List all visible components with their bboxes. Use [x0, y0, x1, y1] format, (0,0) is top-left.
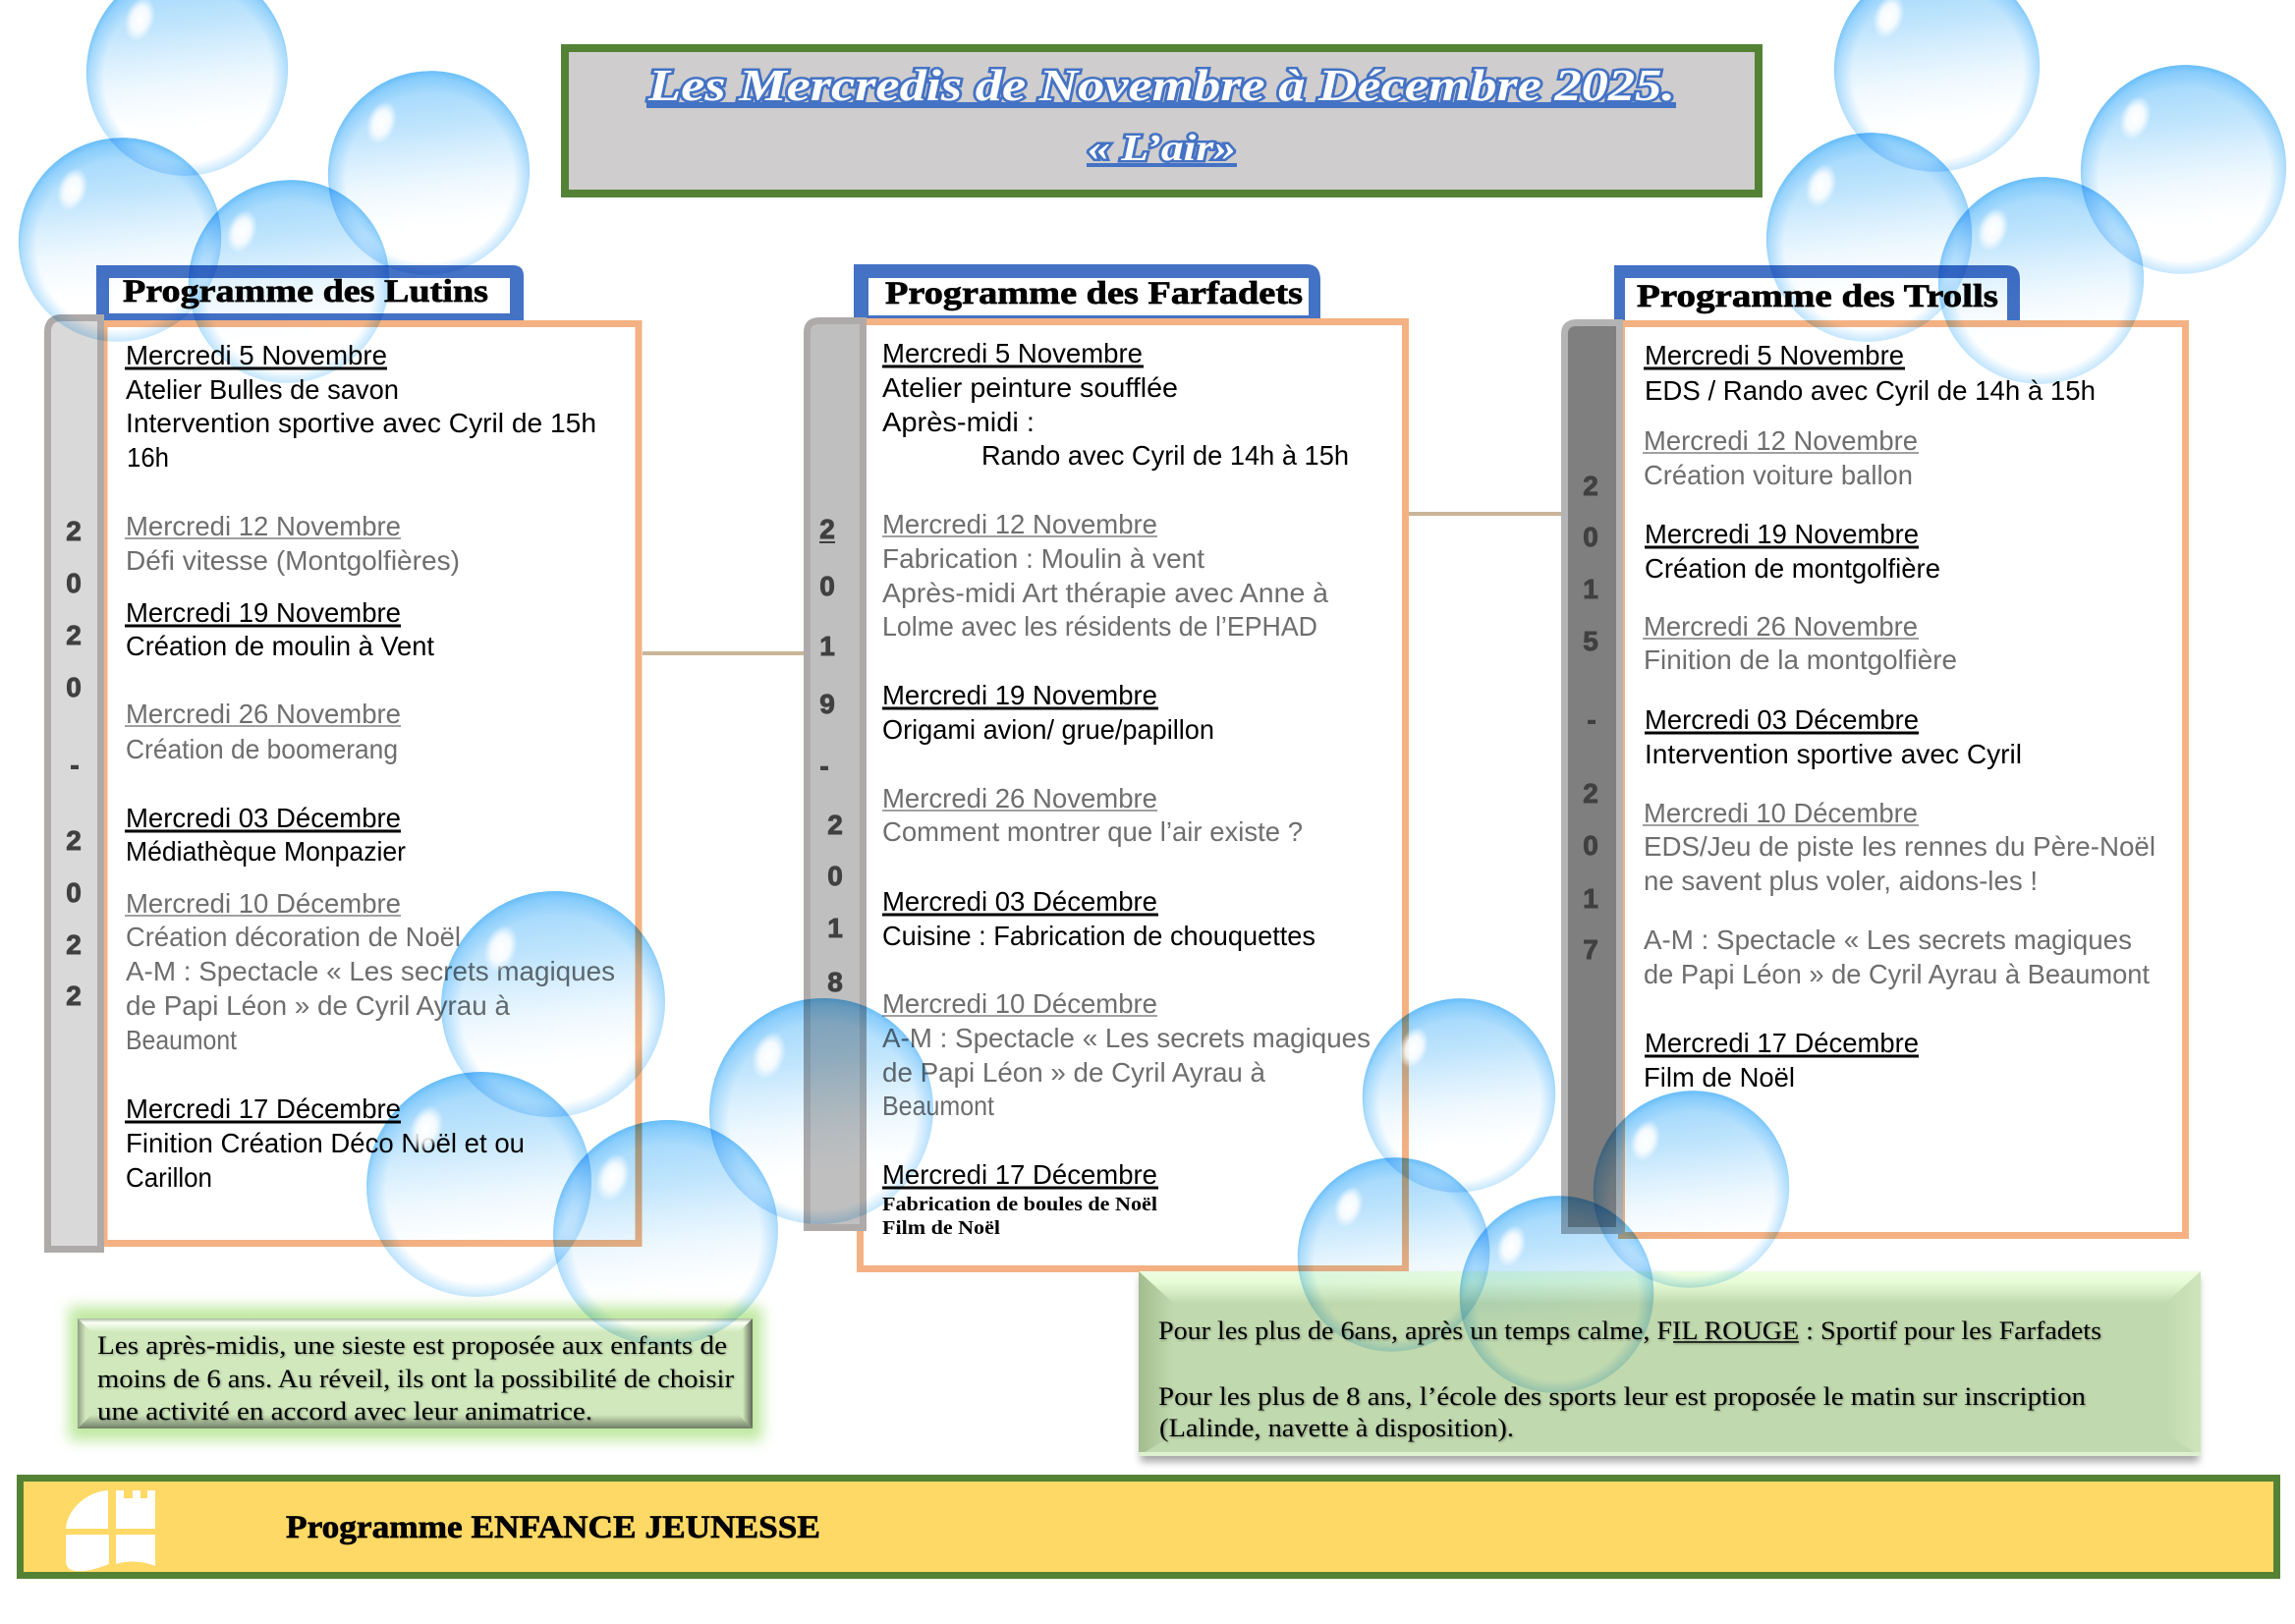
year strip 2019-2018: 1 — [819, 631, 835, 661]
activity: 10 Décembre: de Papi Léon » de Cyril Ayrau à — [882, 1057, 1265, 1088]
year strip 2020-2022 — [47, 318, 100, 1250]
tab: Programme des Farfadets: Programme des Farfadets — [885, 276, 1303, 311]
year strip 2020-2022: 0 — [66, 877, 82, 908]
year strip 2015-2017: 5 — [1583, 626, 1598, 656]
activity: 10 Décembre: Création décoration de Noël — [126, 922, 461, 952]
activity: 10 Décembre — [125, 888, 615, 1055]
note box: plus de 6 et 8 ans — [1139, 1271, 2201, 1462]
activity: 03 Décembre — [1645, 704, 2022, 769]
bubble — [2058, 43, 2295, 296]
tab: Programme des Lutins — [96, 265, 524, 320]
bubbles: top right cluster — [1744, 0, 2295, 405]
year strip 2019-2018: 1 — [827, 913, 843, 943]
activity: 5 Novembre: Mercredi 5 Novembre — [882, 338, 1143, 368]
note box: plus de 6 et 8 ans: (Lalinde, navette à disposition). — [1159, 1414, 1514, 1442]
activity: 5 Novembre: Après-midi : — [882, 407, 1035, 437]
bubble — [1744, 111, 1994, 364]
activity: 12 Novembre: Lolme avec les résidents de l’EPHAD — [882, 611, 1317, 642]
activity: 12 Novembre — [882, 509, 1328, 642]
activity: 10 Décembre — [882, 988, 1371, 1121]
activity: 17 Décembre: Mercredi 17 Décembre — [882, 1159, 1157, 1190]
activity: 5 Novembre: Atelier peinture soufflée — [882, 372, 1178, 403]
activity: 17 Décembre: Film de Noël — [1644, 1062, 1795, 1092]
activity: 19 Novembre: Création de montgolfière — [1645, 553, 1940, 584]
bubbles: top left cluster — [0, 0, 552, 404]
year strip 2015-2017: 0 — [1583, 830, 1598, 861]
bubble — [1438, 1176, 1675, 1413]
footer banner — [20, 1478, 2277, 1576]
note box: sieste: moins de 6 ans. Au réveil, ils ont la possibilité de choisir — [97, 1365, 734, 1393]
activity: 17 Décembre: Mercredi 17 Décembre — [126, 1093, 401, 1124]
activity: 5 Novembre: 16h — [127, 442, 169, 473]
year strip 2015-2017: 0 — [1583, 522, 1598, 552]
activity: 03 Décembre: Mercredi 03 Décembre — [126, 803, 401, 833]
activity: 03 Décembre: Mercredi 03 Décembre — [882, 886, 1157, 917]
activity: 19 Novembre: Mercredi 19 Novembre — [882, 680, 1157, 710]
activity: 26 Novembre: Mercredi 26 Novembre — [882, 783, 1157, 813]
bubble — [0, 117, 244, 363]
bubbles: bottom left cluster — [342, 868, 958, 1370]
activity: 03 Décembre — [125, 803, 406, 867]
year strip 2019-2018: 9 — [819, 689, 835, 719]
activity: 17 Décembre: Mercredi 17 Décembre — [1645, 1028, 1919, 1058]
year strip 2015-2017: - — [1587, 704, 1596, 735]
icon: castle window logo — [66, 1490, 155, 1571]
connector: Farfadets to Trolls — [1409, 512, 1564, 516]
year strip 2020-2022: 2 — [66, 980, 82, 1011]
tab: Programme des Trolls: Programme des Trolls — [1637, 279, 1998, 314]
activity: 26 Novembre: Mercredi 26 Novembre — [126, 699, 401, 729]
activity: 03 Décembre: Mercredi 03 Décembre — [1645, 704, 1919, 735]
year strip 2019-2018: 8 — [827, 967, 843, 997]
activity: 17 Décembre: Film de Noël — [882, 1217, 1000, 1239]
year strip 2019-2018: - — [819, 751, 829, 781]
activity: 17 Décembre — [882, 1159, 1158, 1239]
activity: 17 Décembre — [125, 1093, 525, 1193]
tab: Programme des Farfadets — [854, 264, 1320, 320]
activity: 10 Décembre: de Papi Léon » de Cyril Ayrau à — [126, 990, 510, 1021]
year strip 2020-2022: - — [70, 750, 80, 780]
activity: 12 Novembre: Mercredi 12 Novembre — [882, 509, 1157, 539]
activity: 12 Novembre: Après-midi Art thérapie avec Anne à — [882, 578, 1328, 608]
activity: 10 Décembre: Beaumont — [882, 1091, 994, 1121]
activity: 19 Novembre: Mercredi 19 Novembre — [126, 597, 401, 628]
activity: 12 Novembre — [1643, 425, 1919, 490]
year strip 2015-2017: 2 — [1583, 778, 1598, 809]
activity: 26 Novembre: Mercredi 26 Novembre — [1644, 611, 1918, 642]
activity: 26 Novembre: Comment montrer que l’air existe ? — [882, 816, 1303, 847]
activity: 26 Novembre — [882, 783, 1303, 847]
activity: 12 Novembre: Défi vitesse (Montgolfières) — [126, 545, 460, 576]
activity: 5 Novembre: Intervention sportive avec Cyril de 15h — [126, 408, 596, 438]
tab: Programme des Trolls — [1614, 265, 2020, 322]
main title: Les Mercredis de Novembre à Décembre 2025. — [647, 60, 1675, 110]
activity: 5 Novembre — [882, 338, 1349, 471]
year strip 2015-2017: 1 — [1583, 883, 1598, 914]
activity: 19 Novembre — [125, 597, 434, 661]
activity: 10 Décembre: Mercredi 10 Décembre — [1644, 798, 1918, 828]
year strip 2020-2022: 2 — [66, 620, 82, 650]
note box: sieste — [69, 1307, 762, 1440]
footer text: Programme ENFANCE JEUNESSE — [286, 1510, 820, 1545]
year strip 2019-2018: 0 — [819, 571, 835, 601]
note box: plus de 6 et 8 ans: Pour les plus de 8 ans, l’école des sports leur est proposée le matin sur inscription — [1158, 1382, 2086, 1411]
bubble — [64, 0, 310, 197]
activity: 10 Décembre: ne savent plus voler, aidons-les ! — [1644, 866, 2038, 896]
activity: 5 Novembre — [1644, 340, 2096, 406]
year strip 2020-2022: 2 — [66, 516, 82, 546]
bubble — [1341, 979, 1577, 1212]
activity: 10 Décembre: Beaumont — [126, 1025, 237, 1055]
activity: 19 Novembre — [882, 680, 1214, 745]
activity: 17 Décembre: Fabrication de boules de Noël — [882, 1194, 1157, 1215]
activity: 12 Novembre: Fabrication : Moulin à vent — [882, 543, 1204, 574]
activity: 10 Décembre: de Papi Léon » de Cyril Ayrau à Beaumont — [1644, 959, 2150, 989]
bubble — [306, 50, 552, 296]
title box — [565, 48, 1759, 194]
bubble — [1812, 0, 2062, 194]
bubble — [1572, 1071, 1811, 1308]
activity: 12 Novembre: Mercredi 12 Novembre — [1644, 425, 1918, 456]
activity: 10 Décembre: Mercredi 10 Décembre — [882, 988, 1157, 1019]
activity: 10 Décembre: A-M : Spectacle « Les secrets magiques — [882, 1023, 1371, 1053]
year strip 2015-2017 — [1564, 322, 1619, 1230]
activity: 26 Novembre: Création de boomerang — [126, 734, 398, 764]
panel: Farfadets — [808, 264, 1405, 1269]
frame — [1621, 324, 2185, 1236]
bubble — [417, 868, 690, 1141]
bubble — [166, 159, 412, 404]
activity: 03 Décembre: Intervention sportive avec Cyril — [1645, 739, 2022, 769]
year strip 2019-2018: 2 — [827, 810, 843, 840]
bubble — [1276, 1138, 1511, 1372]
activity: 03 Décembre: Médiathèque Monpazier — [126, 836, 406, 867]
bubble — [529, 1096, 803, 1370]
activity: 5 Novembre: Atelier Bulles de savon — [126, 374, 399, 405]
note box: sieste: une activité en accord avec leur animatrice. — [97, 1397, 592, 1426]
activity: 26 Novembre — [1643, 611, 1957, 675]
activity: 17 Décembre — [1644, 1028, 1919, 1092]
activity: 12 Novembre — [125, 511, 460, 576]
frame — [104, 324, 639, 1244]
activity: 19 Novembre: Origami avion/ grue/papillon — [882, 714, 1214, 745]
bubble — [342, 1048, 616, 1320]
activity: 19 Novembre: Mercredi 19 Novembre — [1645, 519, 1919, 549]
activity: 19 Novembre — [1645, 519, 1940, 584]
activity: 10 Décembre: EDS/Jeu de piste les rennes du Père-Noël — [1644, 831, 2155, 862]
bubbles: bottom right cluster — [1276, 979, 1811, 1413]
bubble — [1916, 156, 2166, 405]
tab: Programme des Lutins: Programme des Lutins — [123, 274, 488, 309]
activity: 12 Novembre: Mercredi 12 Novembre — [126, 511, 401, 541]
activity: 10 Décembre: A-M : Spectacle « Les secrets magiques — [1644, 924, 2132, 955]
activity: 5 Novembre — [125, 340, 596, 473]
year strip 2019-2018: 0 — [827, 861, 843, 891]
activity: 12 Novembre: Création voiture ballon — [1644, 460, 1913, 490]
activity: 5 Novembre: Mercredi 5 Novembre — [1645, 340, 1904, 370]
frame — [861, 322, 1405, 1269]
panel: Lutins — [47, 265, 639, 1250]
connector: Lutins to Farfadets — [643, 651, 806, 655]
bubble — [685, 975, 958, 1248]
activity: 03 Décembre — [882, 886, 1315, 951]
activity: 10 Décembre: A-M : Spectacle « Les secrets magiques — [126, 956, 615, 986]
year strip 2020-2022: 0 — [66, 672, 82, 702]
year strip 2019-2018 — [808, 320, 863, 1228]
year strip 2015-2017: 1 — [1583, 574, 1598, 604]
activity: 5 Novembre: EDS / Rando avec Cyril de 14h à 15h — [1645, 375, 2096, 406]
year strip 2015-2017: 7 — [1583, 934, 1598, 965]
activity: 19 Novembre: Création de moulin à Vent — [126, 631, 434, 661]
activity: 17 Décembre: Carillon — [126, 1162, 212, 1193]
activity: 5 Novembre: Mercredi 5 Novembre — [126, 340, 387, 370]
year strip 2020-2022: 0 — [66, 568, 82, 598]
activity: 17 Décembre: Finition Création Déco Noël et ou — [126, 1128, 525, 1158]
activity: 03 Décembre: Cuisine : Fabrication de chouquettes — [882, 921, 1315, 951]
panel: Trolls — [1564, 265, 2185, 1236]
subtitle: « L’air» — [1088, 128, 1236, 169]
note box: plus de 6 et 8 ans: Pour les plus de 6ans, après un temps calme, FIL ROUGE : Sportif pour les Farfadets — [1158, 1316, 2101, 1345]
activity: 26 Novembre — [125, 699, 401, 764]
year strip 2019-2018: 2 — [819, 514, 835, 544]
year strip 2020-2022: 2 — [66, 929, 82, 960]
activity: 10 Décembre — [1643, 798, 2155, 989]
year strip 2015-2017: 2 — [1583, 471, 1598, 501]
activity: 5 Novembre: Rando avec Cyril de 14h à 15h — [981, 440, 1349, 471]
note box: sieste: Les après-midis, une sieste est proposée aux enfants de — [97, 1331, 727, 1360]
activity: 10 Décembre: Mercredi 10 Décembre — [126, 888, 401, 919]
year strip 2020-2022: 2 — [66, 825, 82, 856]
activity: 26 Novembre: Finition de la montgolfière — [1644, 644, 1957, 675]
